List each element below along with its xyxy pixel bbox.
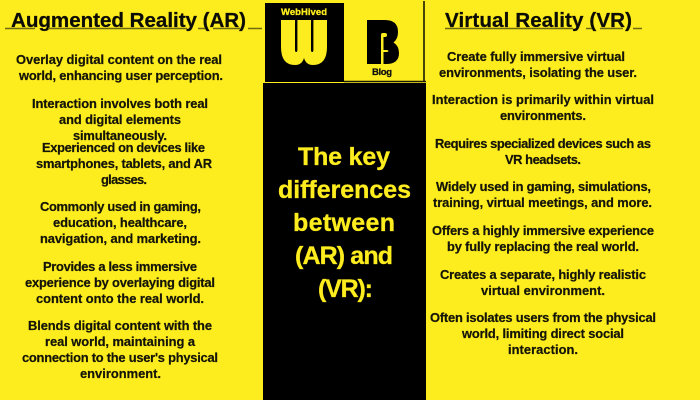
VR point: devices	[435, 136, 651, 167]
AR point: overlay: world, enhancing user perception.	[18, 68, 223, 83]
AR point: blending: environment.	[80, 366, 161, 381]
AR point: uses	[40, 199, 201, 246]
VR point: environment: Creates a separate, highly realistic	[440, 267, 646, 282]
VR point: isolation	[430, 310, 656, 357]
center heading: (AR) and	[295, 242, 393, 270]
VR point: environment	[440, 267, 646, 298]
VR point: experience: by fully replacing the real world.	[447, 239, 639, 254]
frame lines	[344, 1, 426, 82]
VR point: immersion: Create fully immersive virtual	[447, 49, 625, 64]
VR point: immersion	[439, 49, 637, 80]
VR point: isolation: Often isolates users from the physical	[430, 310, 656, 325]
heading: augmented reality: Augmented Reality (AR)	[11, 9, 246, 32]
logo wordmark: WebHived	[281, 7, 327, 18]
VR point: interaction: environments.	[500, 108, 586, 123]
AR point: immersion: experience by overlaying digital	[25, 275, 215, 290]
VR point: isolation: world, limiting direct social	[461, 326, 624, 341]
AR point: immersion	[25, 259, 215, 306]
center heading: between	[293, 209, 395, 237]
VR point: environment: virtual environment.	[481, 283, 605, 298]
AR point: immersion: Provides a less immersive	[43, 259, 197, 274]
AR point: interaction: Interaction involves both real	[32, 96, 208, 111]
VR point: immersion: environments, isolating the user.	[439, 65, 637, 80]
AR point: uses: navigation, and marketing.	[40, 231, 201, 246]
center heading: (VR):	[318, 275, 373, 303]
VR point: experience: Offers a highly immersive experience	[432, 223, 654, 238]
AR point: blending: connection to the user's physical	[22, 350, 218, 365]
VR point: isolation: interaction.	[508, 342, 578, 357]
AR point: overlay: Overlay digital content on the real	[16, 52, 222, 67]
heading: virtual reality: Virtual Reality (VR)	[445, 9, 632, 32]
AR point: devices: glasses.	[101, 172, 147, 187]
logo: webhived	[265, 3, 344, 82]
VR point: uses: Widely used in gaming, simulations,	[436, 179, 651, 194]
panel: augmented reality	[5, 9, 262, 381]
VR point: interaction	[432, 92, 654, 123]
AR point: interaction	[32, 96, 208, 143]
icon: B mark	[367, 20, 399, 64]
AR point: devices	[36, 140, 213, 187]
VR point: experience	[432, 223, 654, 254]
AR point: uses: Commonly used in gaming,	[40, 199, 201, 214]
VR point: devices: VR headsets.	[505, 152, 581, 167]
center heading: differences	[278, 176, 411, 204]
AR point: blending: real world, maintaining a	[45, 334, 196, 349]
AR point: devices: Experienced on devices like	[42, 140, 205, 155]
AR point: blending: Blends digital content with the	[28, 318, 212, 333]
AR point: devices: smartphones, tablets, and AR	[36, 156, 213, 171]
panel: virtual reality	[430, 9, 656, 357]
AR point: interaction: and digital elements	[59, 112, 181, 127]
VR point: interaction: Interaction is primarily within virtual	[432, 92, 654, 107]
panel: center title	[263, 83, 426, 400]
AR point: interaction: simultaneously.	[73, 128, 167, 143]
AR point: immersion: content onto the real world.	[36, 291, 204, 306]
logo label: Blog	[372, 67, 392, 78]
center heading: The key	[298, 143, 390, 171]
VR point: uses: training, virtual meetings, and more.	[433, 195, 652, 210]
AR point: overlay	[16, 52, 223, 83]
VR point: uses	[433, 179, 652, 210]
logo: blog	[367, 20, 399, 78]
AR point: blending	[22, 318, 218, 381]
AR point: uses: education, healthcare,	[53, 215, 187, 230]
VR point: devices: Requires specialized devices such as	[435, 136, 651, 151]
center heading	[278, 143, 411, 303]
icon: W mark	[281, 20, 327, 65]
